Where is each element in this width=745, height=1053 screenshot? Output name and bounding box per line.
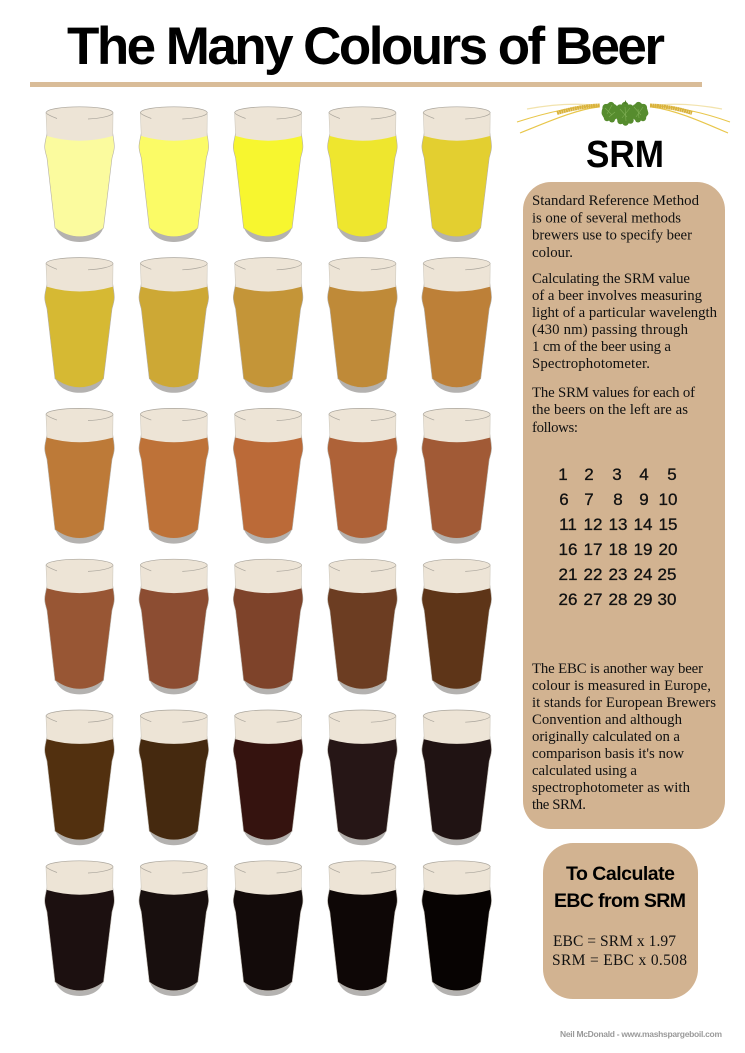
glass: SRM 17 [139,559,209,694]
text: calculating SRM: 1 cm of the beer using a [532,339,671,355]
glass: SRM 1 [45,107,114,242]
table: SRM values: 9 [639,490,649,509]
glass: SRM 27 [139,861,209,996]
table: SRM values: 2 [584,465,594,484]
glass: SRM 2 [139,107,209,242]
heading: to calculate [554,863,686,912]
text: EBC explanation: it stands for European Brewers [532,695,716,711]
table: SRM values: 16 [559,540,577,559]
glass: SRM 7 [139,258,209,393]
table: SRM values: 22 [584,565,602,584]
panel background [523,182,725,829]
title rule [30,82,702,87]
beer glasses grid [45,107,492,996]
glass: SRM 8 [233,258,303,393]
icon: hops [602,100,648,126]
glass: SRM 12 [139,408,209,544]
table: SRM values: 21 [559,565,577,584]
table: SRM values: 17 [584,540,602,559]
glass: SRM 6 [45,258,114,393]
table: SRM values: 3 [612,465,622,484]
glass: SRM 11 [45,408,114,544]
text: SRM definition: is one of several methods [532,210,681,226]
glass: SRM 24 [328,710,397,845]
glass: SRM 25 [422,710,492,845]
icon: left wheat [517,104,600,133]
panel: SRM explanation [523,182,725,829]
formulae: SRM = EBC x 0.508 [552,952,687,969]
table: SRM values: 10 [659,490,677,509]
text: calculating SRM: Spectrophotometer. [532,356,650,372]
glass: SRM 10 [422,258,492,393]
glass: SRM 18 [233,559,303,694]
table: SRM values: 6 [559,490,569,509]
text: calculating SRM: light of a particular wavelength [532,305,718,321]
table: SRM values: 20 [659,540,677,559]
table: SRM values: 14 [634,515,652,534]
text: SRM definition: colour. [532,245,573,261]
table: SRM values: 27 [584,590,602,609]
table: SRM values [558,465,677,609]
table: SRM values: 4 [639,465,649,484]
glass: SRM 13 [233,408,303,544]
table: SRM values: 23 [609,565,627,584]
title: The Many Colours of Beer [67,17,665,76]
footer credit: Neil McDonald - www.mashspargeboil.com [560,1029,722,1039]
table: SRM values: 13 [609,515,627,534]
text: calculating SRM: (430 nm) passing through [532,322,689,338]
glass: SRM 30 [422,861,492,996]
table: SRM values: 5 [667,465,677,484]
glass: SRM 4 [328,107,397,242]
table: SRM values: 28 [609,590,627,609]
glass: SRM 3 [233,107,303,242]
glass: SRM 28 [233,861,303,996]
formulae [552,933,687,969]
text: EBC explanation [532,661,716,813]
text: EBC explanation: the SRM. [532,797,586,813]
text: SRM values intro: The SRM values for each of [532,385,695,401]
text: SRM definition [532,193,700,261]
text: EBC explanation: colour is measured in Europe, [532,678,711,694]
text: calculating SRM: Calculating the SRM value [532,271,690,287]
text: EBC explanation: calculated using a [532,763,637,779]
text: EBC explanation: originally calculated on a [532,729,680,745]
text: calculating SRM [532,271,718,372]
table: SRM values: 11 [559,515,577,534]
text: calculating SRM: of a beer involves measuring [532,288,703,304]
table: SRM values: 26 [559,590,577,609]
table: SRM values: 1 [558,465,568,484]
table: SRM values: 7 [584,490,594,509]
glass: SRM 9 [328,258,397,393]
heading: SRM: SRM [586,134,664,176]
formulae: EBC = SRM x 1.97 [553,933,676,950]
glass: SRM 20 [422,559,492,694]
glass: SRM 15 [422,408,492,544]
text: SRM definition: Standard Reference Method [532,193,700,209]
glass: SRM 26 [45,861,114,996]
text: SRM values intro: the beers on the left are as [532,402,688,418]
glass: SRM 5 [422,107,492,242]
glass: SRM 23 [233,710,303,845]
panel: EBC formulae [543,843,698,999]
glass: SRM 14 [328,408,397,544]
text: SRM values intro: follows: [532,420,578,436]
table: SRM values: 24 [634,565,652,584]
table: SRM values: 15 [659,515,677,534]
text: EBC explanation: spectrophotometer as with [532,780,691,796]
table: SRM values: 25 [658,565,676,584]
icon: wheat and hops [517,100,730,133]
icon: right wheat [650,104,730,133]
table: SRM values: 30 [658,590,676,609]
text: EBC explanation: Convention and although [532,712,683,728]
panel background [543,843,698,999]
table: SRM values: 8 [613,490,623,509]
heading: to calculate: EBC from SRM [554,890,686,912]
table: SRM values: 19 [634,540,652,559]
table: SRM values: 12 [584,515,602,534]
heading: to calculate: To Calculate [566,863,675,885]
table: SRM values: 29 [634,590,652,609]
text: EBC explanation: The EBC is another way beer [532,661,703,677]
glass: SRM 29 [328,861,397,996]
glass: SRM 16 [45,559,114,694]
text: EBC explanation: comparison basis it's now [532,746,684,762]
text: SRM definition: brewers use to specify beer [532,228,692,244]
glass: SRM 19 [328,559,397,694]
glass: SRM 22 [139,710,209,845]
glass: SRM 21 [45,710,114,845]
text: SRM values intro [532,385,695,436]
table: SRM values: 18 [609,540,627,559]
